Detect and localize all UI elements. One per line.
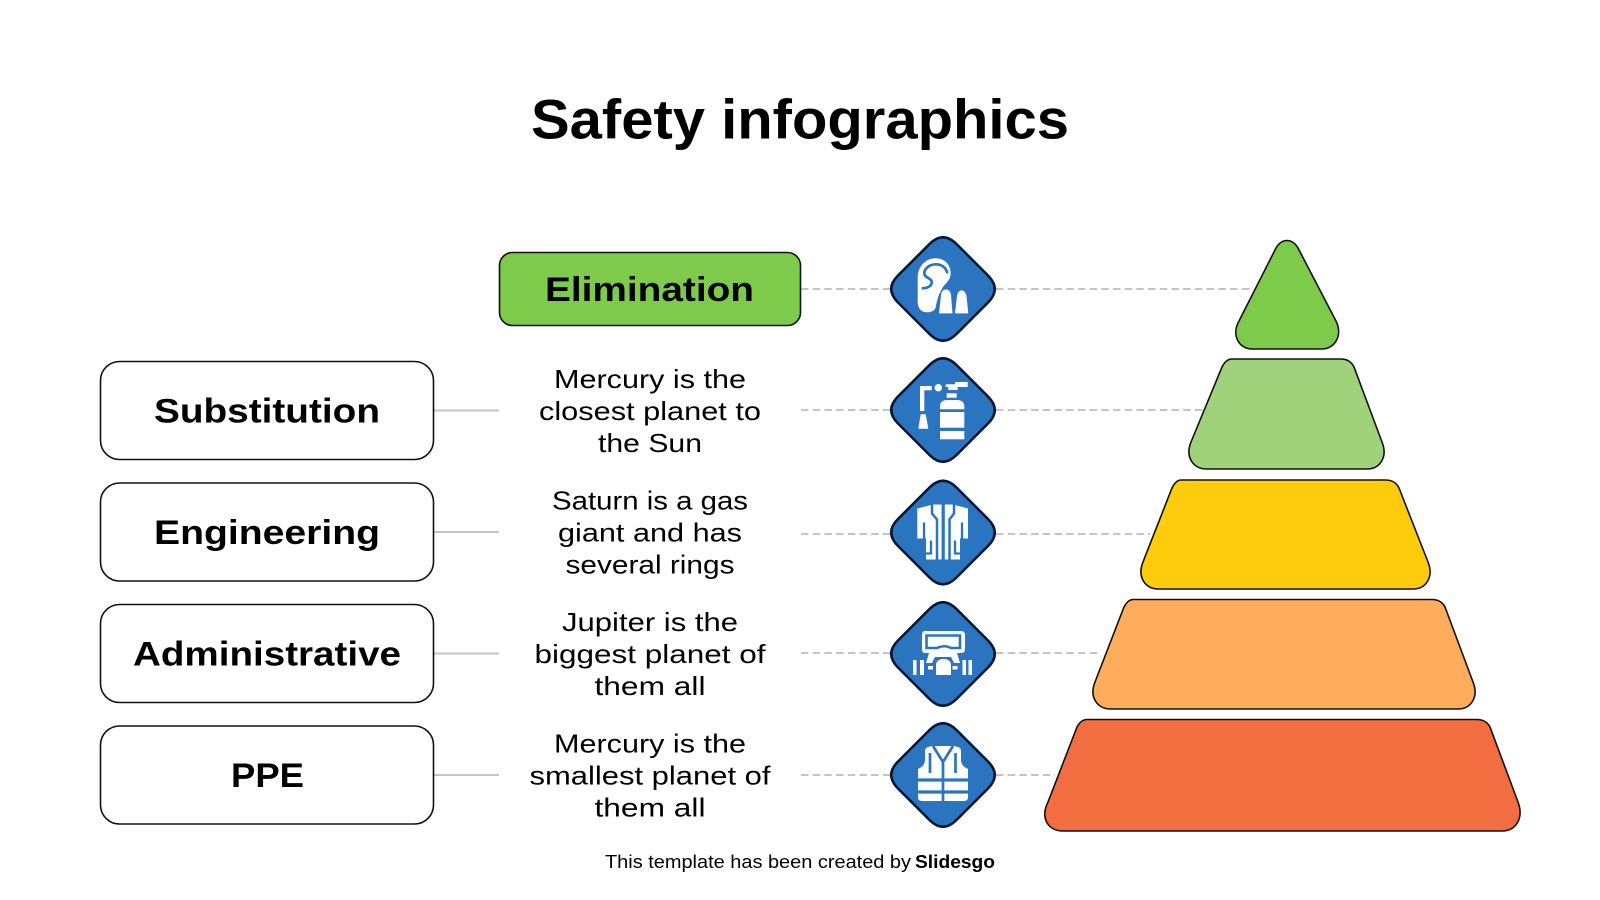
text block: engineering description: giant and has: [558, 518, 742, 548]
text block: engineering description: Saturn is a gas: [552, 486, 748, 516]
icon: fire extinguisher: [891, 358, 995, 462]
tier 5: red-orange: [1045, 720, 1520, 831]
text block: substitution description: the Sun: [598, 428, 702, 458]
label: Substitution: [100, 362, 434, 460]
label: Engineering: Engineering: [154, 514, 380, 552]
text block: substitution description: closest planet to: [539, 396, 761, 426]
text block: administrative description: them all: [594, 671, 706, 701]
tier 1: green: [1236, 240, 1339, 349]
tier 3: yellow: [1141, 480, 1430, 589]
label: Administrative: Administrative: [133, 636, 401, 674]
text block: PPE description: them all: [594, 792, 706, 822]
tier 4: orange: [1093, 600, 1475, 709]
label: PPE: PPE: [231, 757, 304, 795]
text block: engineering description: several rings: [566, 550, 734, 580]
icon: ear and earplugs: [891, 237, 995, 341]
text block: administrative description: [534, 607, 766, 701]
footer credit: This template has been created by: [605, 852, 911, 872]
label: PPE: [100, 726, 434, 824]
text block: administrative description: Jupiter is the: [562, 607, 738, 637]
title: Safety infographics: [531, 88, 1069, 150]
label: Substitution: Substitution: [154, 392, 380, 430]
text block: PPE description: [530, 728, 771, 822]
label: Engineering: [100, 483, 434, 581]
text block: substitution description: [539, 364, 761, 458]
text block: engineering description: [552, 486, 748, 580]
tier 2: light green: [1189, 359, 1384, 469]
label: Elimination: [500, 252, 800, 326]
footer credit: Slidesgo: [915, 852, 995, 872]
text block: PPE description: smallest planet of: [530, 760, 771, 790]
text block: PPE description: Mercury is the: [554, 728, 746, 758]
text block: administrative description: biggest planet of: [534, 639, 766, 669]
icon: safety vest: [891, 723, 995, 827]
text block: substitution description: Mercury is the: [554, 364, 746, 394]
label: Administrative: [100, 604, 434, 702]
icon: respirator mask: [891, 602, 995, 706]
pyramid chart: [1045, 240, 1520, 831]
label: Elimination: Elimination: [545, 271, 754, 309]
icon: protective coat: [891, 481, 995, 584]
